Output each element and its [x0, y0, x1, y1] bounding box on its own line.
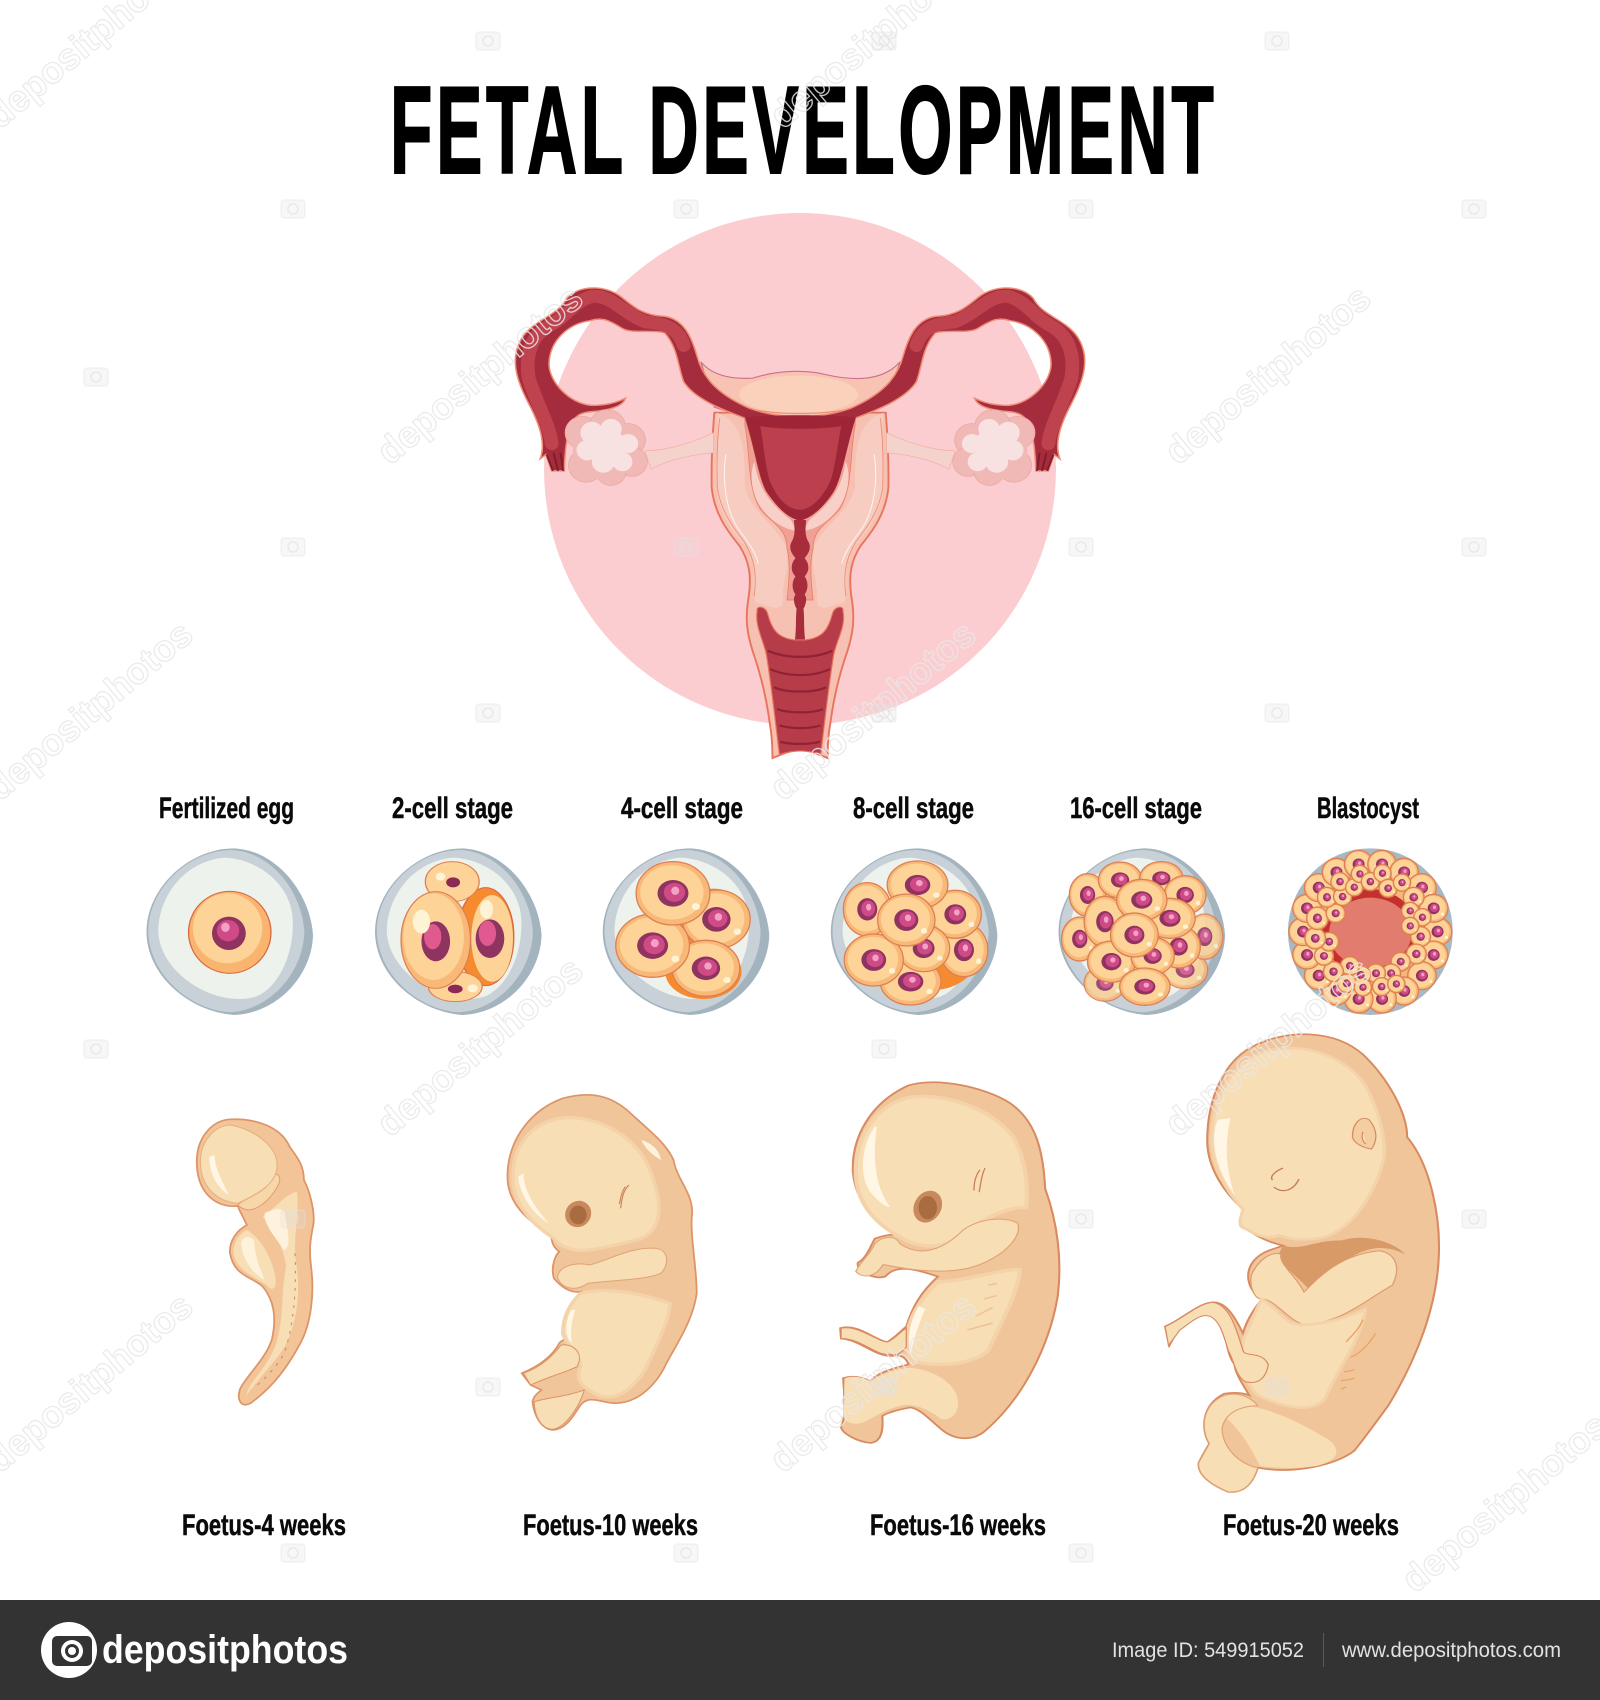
foetus: 16 weeks [840, 1082, 1059, 1443]
eggs: later three stages [831, 848, 1453, 1015]
left half of tube and wall [515, 288, 800, 608]
vaginal ribs [768, 651, 832, 744]
watermarks: depositphotos [1157, 949, 1378, 1144]
inner ring of cells [1305, 865, 1431, 996]
website url: www.depositphotos.com [1341, 1639, 1561, 1662]
watermark camera icons [84, 32, 1486, 1562]
foetus: 10 weeks [507, 1095, 697, 1430]
logo wordmark: depositphotos [102, 1628, 348, 1672]
egg: 8-cell [831, 848, 997, 1015]
label: fertilized egg: Fertilized egg [159, 792, 294, 825]
cervical canal [790, 520, 810, 642]
fundus [701, 362, 900, 422]
foetus: 4 weeks [197, 1119, 314, 1405]
label: 10 weeks: Foetus-10 weeks [523, 1509, 698, 1542]
image id: Image ID: 549915052 [1112, 1639, 1304, 1662]
title: FETAL DEVELOPMENT [390, 62, 1214, 200]
egg: fertilized [146, 848, 313, 1015]
watermarks: depositphotos [762, 613, 983, 808]
foetuses: 16 and 20 weeks [840, 1034, 1439, 1492]
footer bar [0, 1600, 1600, 1700]
label: 2-cell stage: 2-cell stage [392, 792, 513, 825]
label: 16-cell stage: 16-cell stage [1070, 792, 1202, 825]
foetus labels [182, 1509, 1399, 1542]
right half of tube and wall [800, 288, 1085, 608]
label row: cell stages [159, 792, 1419, 825]
label: blastocyst: Blastocyst [1317, 792, 1419, 825]
foetus: 20 weeks [1165, 1034, 1439, 1492]
pink background circle [544, 213, 1056, 725]
watermarks: depositphotos [369, 277, 590, 472]
label: 8-cell stage: 8-cell stage [853, 792, 974, 825]
label: 4-cell stage: 4-cell stage [621, 792, 743, 825]
eggs: first three stages [146, 848, 769, 1015]
egg: 4-cell [603, 848, 769, 1015]
uterine cavity [745, 415, 856, 521]
watermarks: depositphotos [369, 949, 590, 1144]
icon: camera logo [41, 1622, 97, 1678]
egg: blastocyst [1288, 848, 1453, 1015]
uterus body wall [712, 413, 889, 758]
uterus illustration [515, 288, 1085, 758]
outer ring of cells [1289, 850, 1452, 1013]
watermarks: depositphotos [1157, 277, 1378, 472]
label: 16 weeks: Foetus-16 weeks [870, 1509, 1046, 1542]
label: 4 weeks: Foetus-4 weeks [182, 1509, 346, 1542]
egg: 2-cell [375, 848, 542, 1015]
foetuses: 4 and 10 weeks [197, 1095, 697, 1430]
egg: 16-cell [1059, 848, 1225, 1015]
vaginal canal [757, 607, 844, 754]
watermarks: depositphotos [762, 1285, 983, 1480]
label: 20 weeks: Foetus-20 weeks [1223, 1509, 1399, 1542]
